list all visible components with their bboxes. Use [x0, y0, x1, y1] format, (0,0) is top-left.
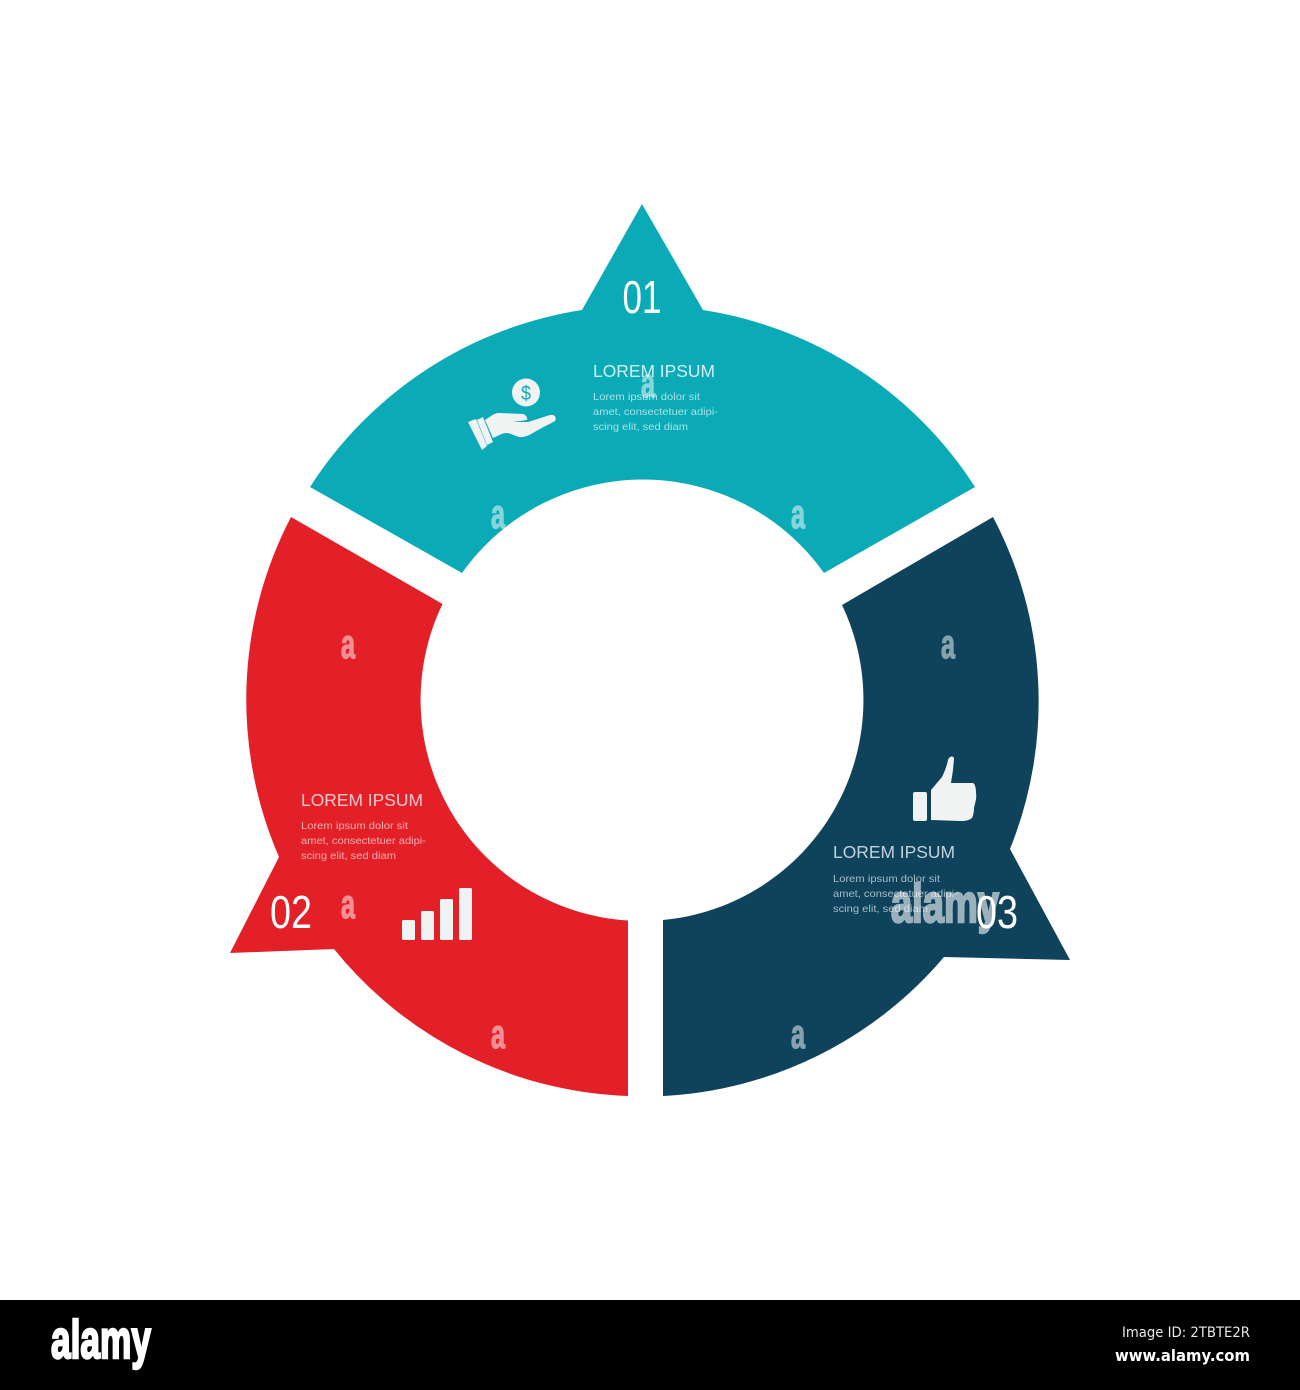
watermark: small letters: [341, 360, 956, 1057]
footer url: www.alamy.com: [1115, 1346, 1250, 1365]
icon: bar chart: [402, 888, 472, 940]
text block: segment 03: Lorem ipsum dolor sit: [833, 873, 940, 885]
watermark: small letters: a: [341, 881, 356, 927]
icon: hand holding coin: $: [521, 383, 531, 405]
text block: segment 01: scing elit, sed diam: [593, 421, 688, 433]
text block: segment 01: [593, 391, 719, 433]
watermark: small letters: a: [641, 360, 656, 406]
text block: segment 02: Lorem ipsum dolor sit: [301, 820, 408, 832]
heading: segment 02: LOREM IPSUM: [301, 790, 423, 810]
text block: segment 01: Lorem ipsum dolor sit: [593, 391, 700, 403]
text block: segment 02: amet, consectetuer adipi-: [301, 835, 427, 847]
watermark: small letters: a: [491, 491, 506, 537]
panel: segment 02 red: [230, 517, 628, 1096]
watermark: small letters: a: [941, 621, 956, 667]
footer logo: alamy: [51, 1310, 151, 1370]
text block: segment 03: scing elit, sed diam: [833, 903, 928, 915]
watermark: small letters: a: [341, 621, 356, 667]
text block: segment 02: [301, 820, 427, 862]
watermark: small letters: a: [791, 491, 806, 537]
number 02: 02: [270, 886, 312, 938]
text block: segment 03: amet, consectetuer adipi-: [833, 888, 959, 900]
footer image id: Image ID: 2TBTE2R: [1122, 1325, 1250, 1341]
text block: segment 01: amet, consectetuer adipi-: [593, 406, 719, 418]
text block: segment 02: scing elit, sed diam: [301, 850, 396, 862]
watermark: small letters: a: [491, 1011, 506, 1057]
text block: segment 03: [833, 873, 959, 915]
icon: thumbs up: [913, 756, 976, 821]
heading: segment 03: LOREM IPSUM: [833, 842, 955, 862]
footer bar: [0, 1300, 1300, 1390]
watermark: alamy: alamy: [891, 874, 999, 934]
number 01: 01: [622, 271, 662, 323]
heading: segment 01: LOREM IPSUM: [593, 361, 715, 381]
panel: segment 01 teal: [310, 204, 975, 573]
watermark: small letters: a: [791, 1011, 806, 1057]
icon: hand holding coin: [468, 378, 556, 450]
panel: segment 03 navy: [663, 517, 1070, 1096]
number 03: 03: [976, 886, 1018, 938]
